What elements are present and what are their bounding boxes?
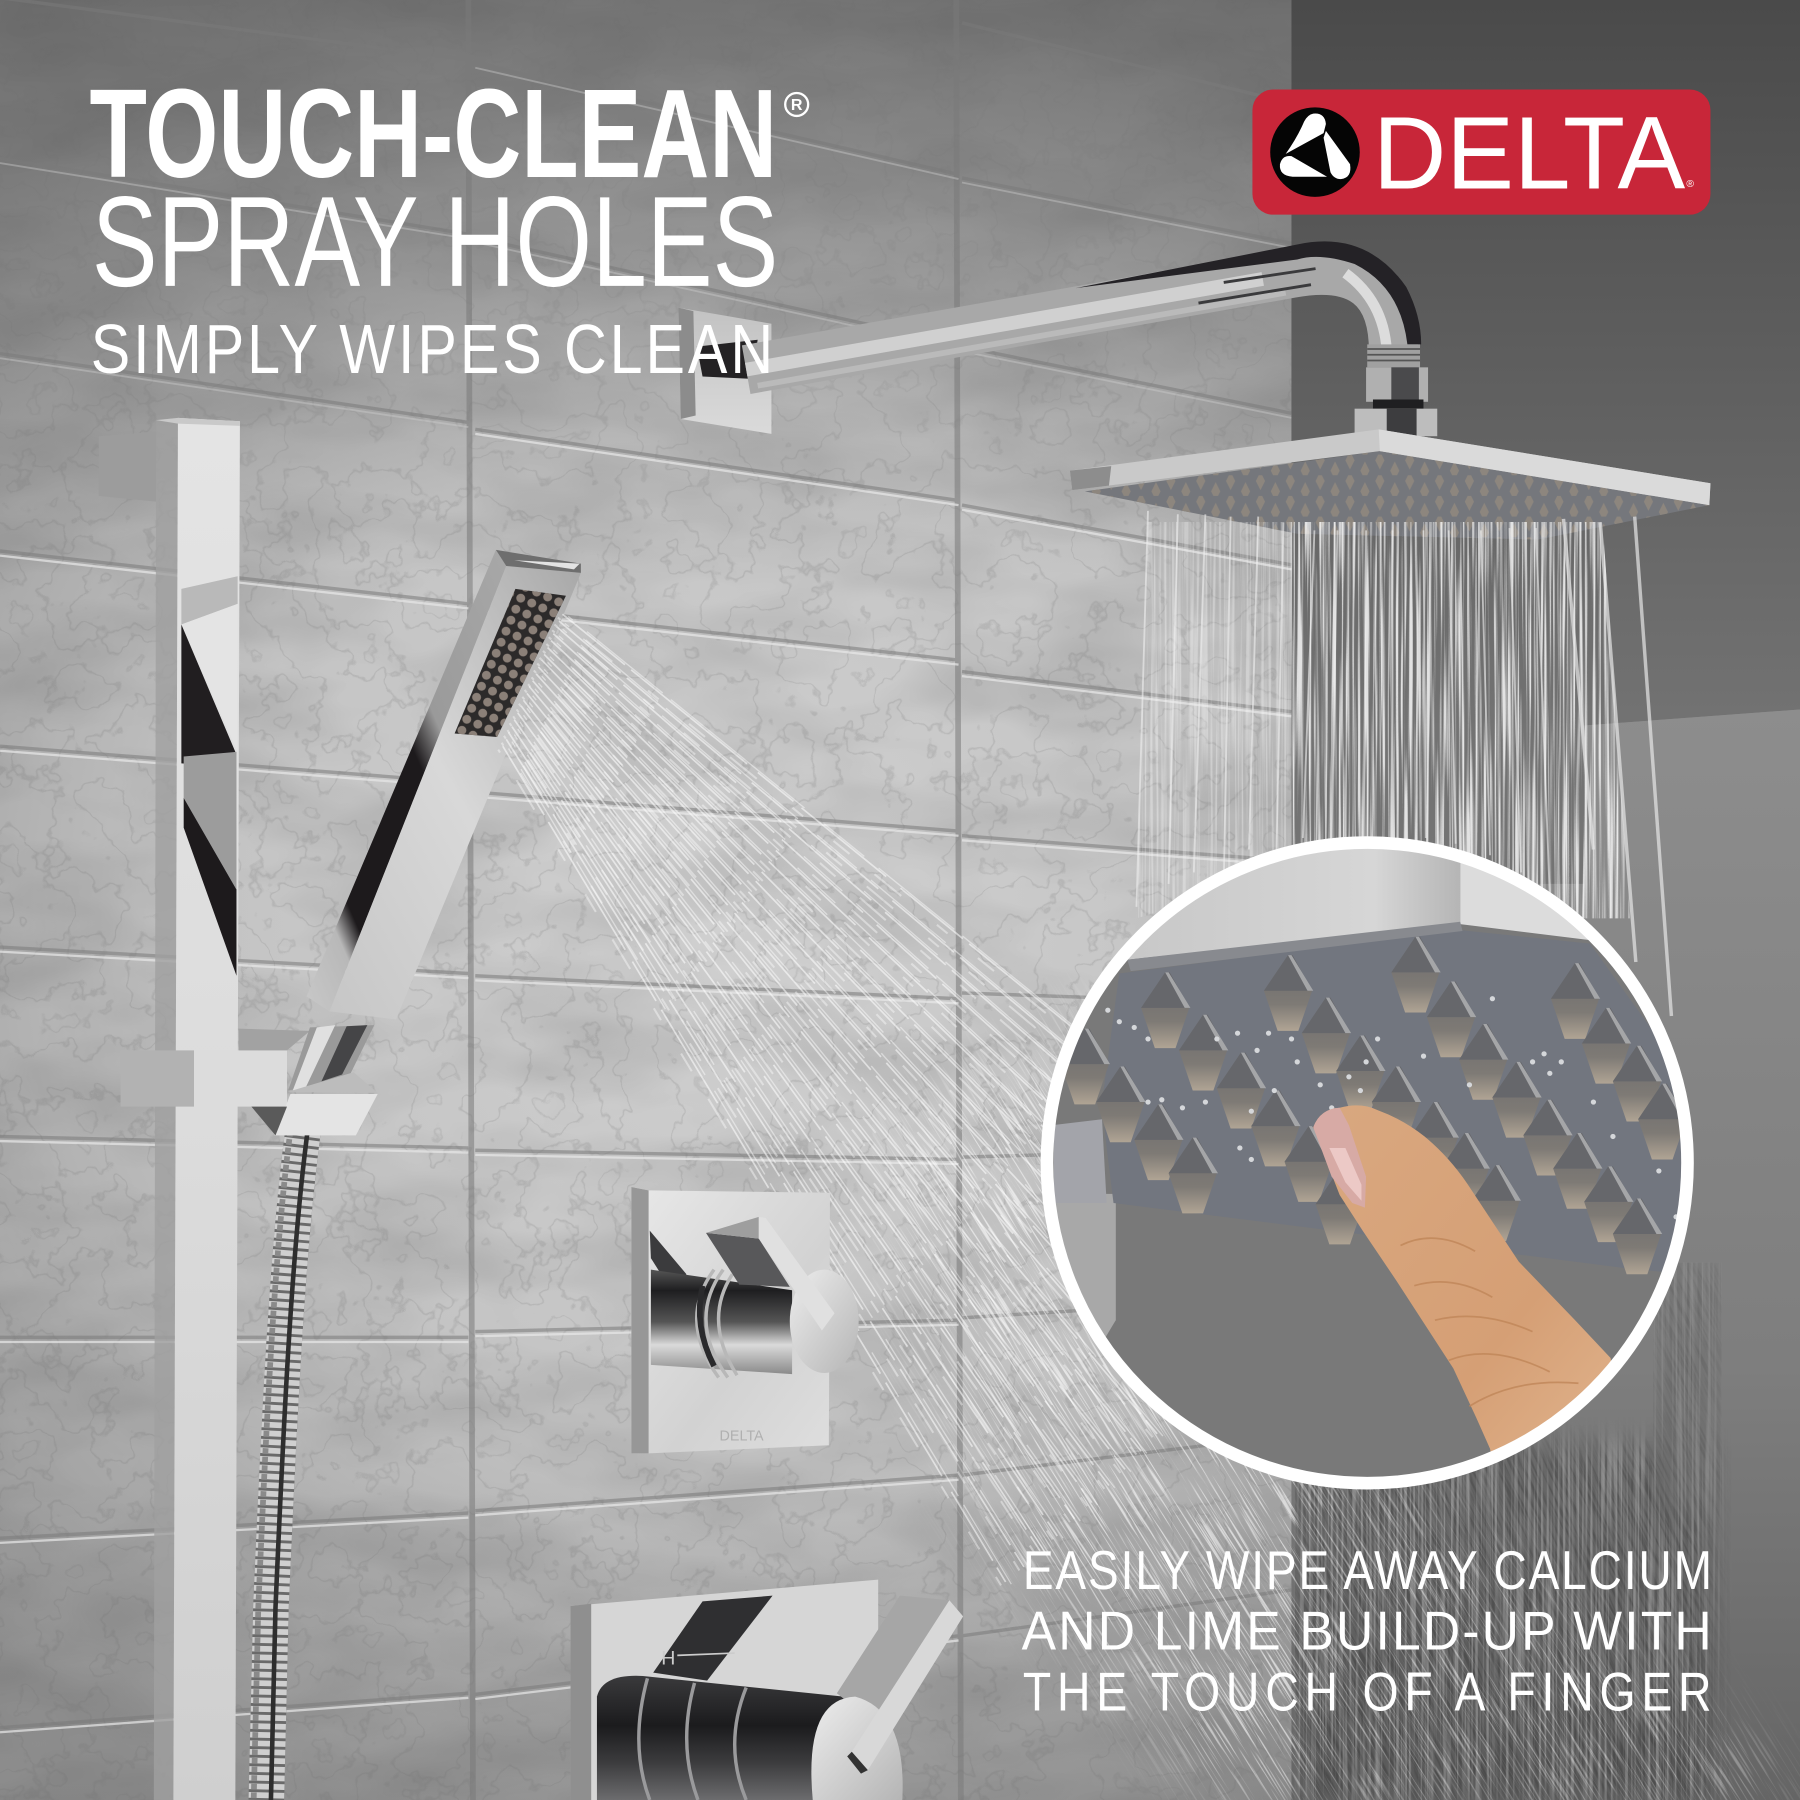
arm tube [746,270,1394,370]
tile wall background [0,0,1291,1800]
thread [1367,344,1420,367]
swivel joint [288,1025,374,1091]
nut [1366,367,1428,402]
registered mark [785,93,808,116]
slider block [121,1050,194,1107]
hand shower face [329,566,581,1019]
head rim [1128,848,1460,960]
bar side face [154,418,178,1800]
wall bracket [99,432,156,502]
shower arm [678,241,1437,436]
lever [852,1600,963,1770]
caption [1022,1539,1717,1722]
cylinder [651,1270,792,1374]
inset circle: finger wiping nozzles [1033,827,1699,1492]
logo registered mark: ® [1686,179,1694,190]
hose [254,1131,308,1800]
subtitle: SIMPLY WIPES CLEAN [91,310,776,388]
nozzle panel [455,589,566,737]
wall behind rain [1291,723,1588,895]
head top face [1070,429,1710,505]
dark right wall [1291,0,1800,735]
collar base [1355,409,1437,436]
rain on lower wall [1295,1263,1731,1800]
bar front face [173,418,240,1800]
upper grooves highlight lines [0,68,1291,427]
knob disc [790,1270,859,1373]
lever [759,1217,835,1330]
inset backdrop [1053,863,1660,1477]
handle cylinder [597,1676,872,1800]
registered mark: R [791,96,803,114]
head underside [1085,451,1709,540]
caption line 2: AND LIME BUILD-UP WITH [1022,1600,1714,1662]
hand shower top [496,550,581,573]
rain from overhead shower [1136,511,1671,1016]
head underside [1112,1194,1116,1204]
bar reflection [181,576,238,624]
tile grooves shadow lines [0,0,1291,1800]
inset wall corner [1056,1194,1116,1337]
title line 1: TOUCH-CLEAN [90,63,777,204]
handle blade [837,1596,949,1722]
arm dark edge [1076,241,1421,344]
finger creases [1401,1238,1578,1406]
chrome wedge [650,1231,686,1293]
shower valve upper [631,1187,859,1453]
glass panel lower right [1291,709,1800,1800]
plate [631,1187,830,1453]
handle disc [811,1697,903,1800]
wall flange [678,308,771,434]
Delta logo badge [1252,90,1710,215]
plate [571,1580,878,1800]
hand shower side [307,550,506,1011]
holder box [288,1072,378,1093]
title [90,63,808,388]
fingernail [1313,1108,1366,1208]
shower valve lower [571,1580,963,1800]
finger [1313,1105,1611,1452]
hand shower [251,550,581,1135]
white ring [1047,843,1688,1483]
lever reflection [653,1596,773,1681]
plate mark: DELTA [720,1429,764,1445]
slide bar assembly [99,418,310,1800]
lever shadow [706,1233,790,1287]
collar [697,1270,737,1378]
temperature mark: H [661,1648,675,1670]
tile grooves highlight lines [0,434,1291,1732]
nozzles [1061,937,1688,1274]
title line 2: SPRAY HOLES [92,171,778,314]
water droplets [1108,999,1676,1217]
rain shower head [1070,429,1710,540]
holder top wedge [239,1029,310,1050]
logo wordmark: DELTA [1373,94,1685,210]
water streaks from hand shower [498,614,1800,1800]
logo emblem [1270,107,1360,197]
